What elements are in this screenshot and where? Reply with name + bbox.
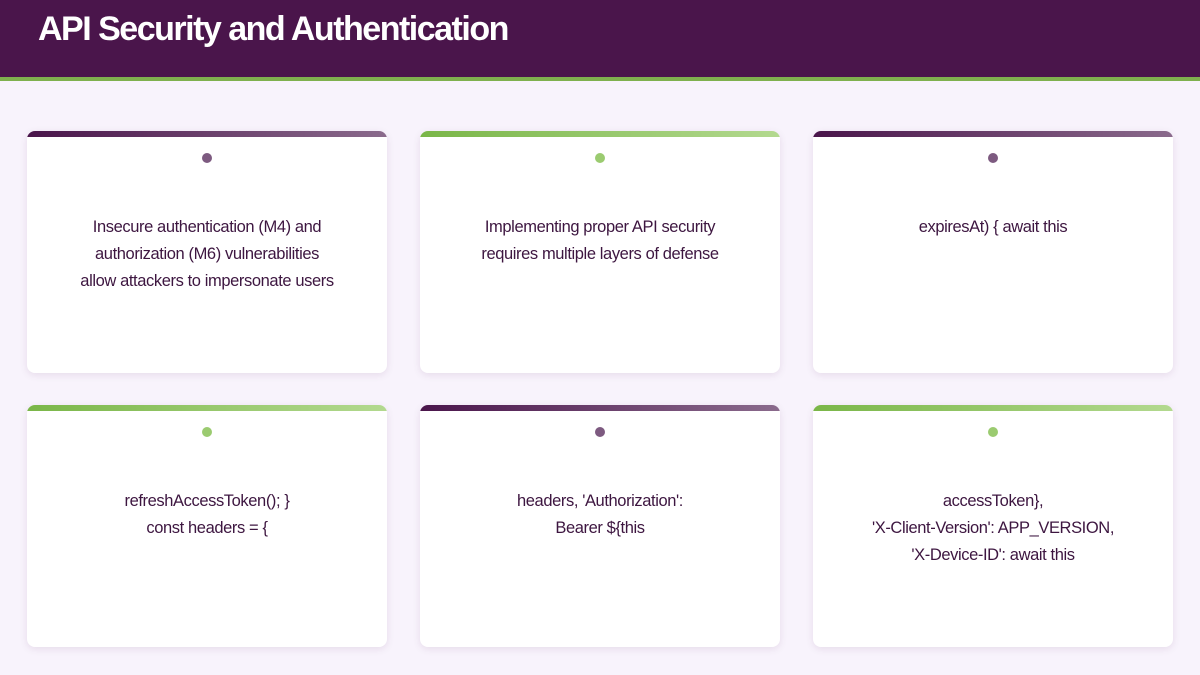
card 5 xyxy=(420,405,780,647)
card 1 xyxy=(27,131,387,373)
card 3 text: expiresAt) { await this xyxy=(919,218,1067,236)
card 6 text: 'X-Device-ID': await this xyxy=(911,546,1075,564)
title: API Security and Authentication xyxy=(38,10,508,48)
card 3 xyxy=(813,131,1173,373)
card 2 text: requires multiple layers of defense xyxy=(481,245,719,263)
card 5 text xyxy=(517,492,683,537)
card 2 xyxy=(420,131,780,373)
card 1 text: authorization (M6) vulnerabilities xyxy=(95,245,319,263)
card 4 text xyxy=(124,492,290,537)
card 1 text: Insecure authentication (M4) and xyxy=(93,218,321,236)
card 5 text: headers, 'Authorization': xyxy=(517,492,683,510)
header xyxy=(0,0,1200,81)
card 5 text: Bearer ${this xyxy=(555,519,645,537)
card 6 text: 'X-Client-Version': APP_VERSION, xyxy=(872,519,1114,537)
card 2 text xyxy=(481,218,719,263)
card 6 text: accessToken}, xyxy=(943,492,1043,510)
card 2 text: Implementing proper API security xyxy=(485,218,715,236)
card 1 text xyxy=(80,218,334,290)
card 4 text: refreshAccessToken(); } xyxy=(124,492,290,510)
card 6 xyxy=(813,405,1173,647)
card 1 text: allow attackers to impersonate users xyxy=(80,272,334,290)
card 4 xyxy=(27,405,387,647)
card 4 text: const headers = { xyxy=(146,519,268,537)
card 6 text xyxy=(872,492,1114,564)
